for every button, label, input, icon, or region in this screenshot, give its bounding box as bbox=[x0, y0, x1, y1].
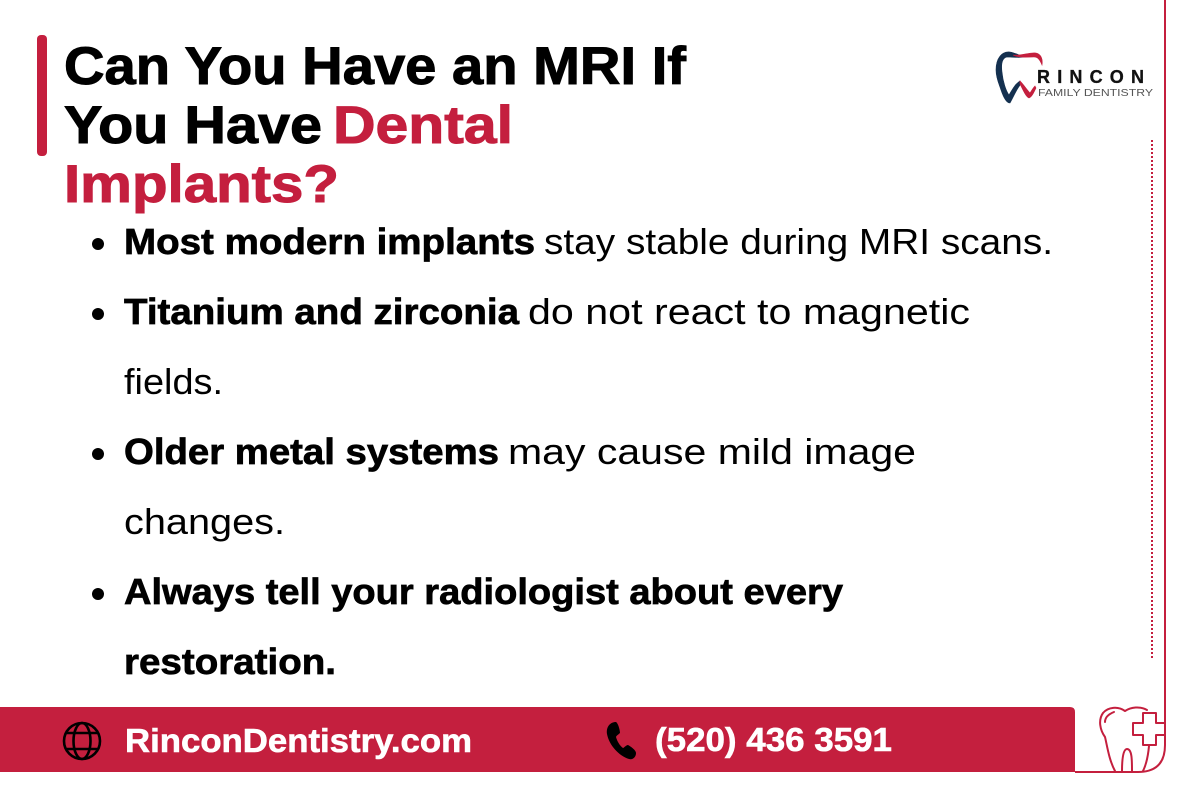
bullet 4: Always tell your radiologist about every bbox=[124, 571, 843, 612]
bullet 1: stay stable during MRI scans. bbox=[544, 221, 1053, 262]
decorative frame line bbox=[1075, 0, 1165, 772]
icon: tooth with cross bbox=[1100, 707, 1165, 771]
bullet 2: Titanium and zirconia bbox=[124, 291, 520, 332]
bullet 3: changes. bbox=[124, 501, 285, 542]
bullet 2: do not react to magnetic bbox=[528, 291, 970, 332]
icon: phone bbox=[607, 722, 636, 759]
footer bar bbox=[0, 707, 1075, 772]
bullet 3: may cause mild image bbox=[508, 431, 916, 472]
bullet 1: Most modern implants bbox=[124, 221, 535, 262]
bullet 1 bbox=[92, 221, 1053, 262]
icon: globe bbox=[64, 723, 100, 759]
title accent bar bbox=[37, 35, 47, 156]
phone number: (520) 436 3591 bbox=[655, 721, 892, 758]
title: Implants? bbox=[64, 155, 339, 214]
title bbox=[64, 37, 686, 214]
website: RinconDentistry.com bbox=[125, 722, 472, 759]
logo tagline: FAMILY DENTISTRY bbox=[1038, 88, 1153, 99]
icon: tooth logo bbox=[996, 52, 1042, 103]
dotted side line bbox=[1151, 140, 1153, 658]
bullet 4: restoration. bbox=[124, 641, 336, 682]
bullet 3 bbox=[92, 431, 916, 542]
logo bbox=[996, 52, 1153, 103]
bullet list bbox=[92, 221, 1053, 682]
title: Can You Have an MRI If bbox=[64, 37, 686, 96]
bullet 2: fields. bbox=[124, 361, 223, 402]
bullet 4 bbox=[92, 571, 843, 682]
title: You Have bbox=[64, 96, 322, 155]
logo name: RINCON bbox=[1037, 67, 1144, 87]
title: Dental bbox=[333, 96, 513, 155]
bullet 3: Older metal systems bbox=[124, 431, 499, 472]
bullet 2 bbox=[92, 291, 970, 402]
